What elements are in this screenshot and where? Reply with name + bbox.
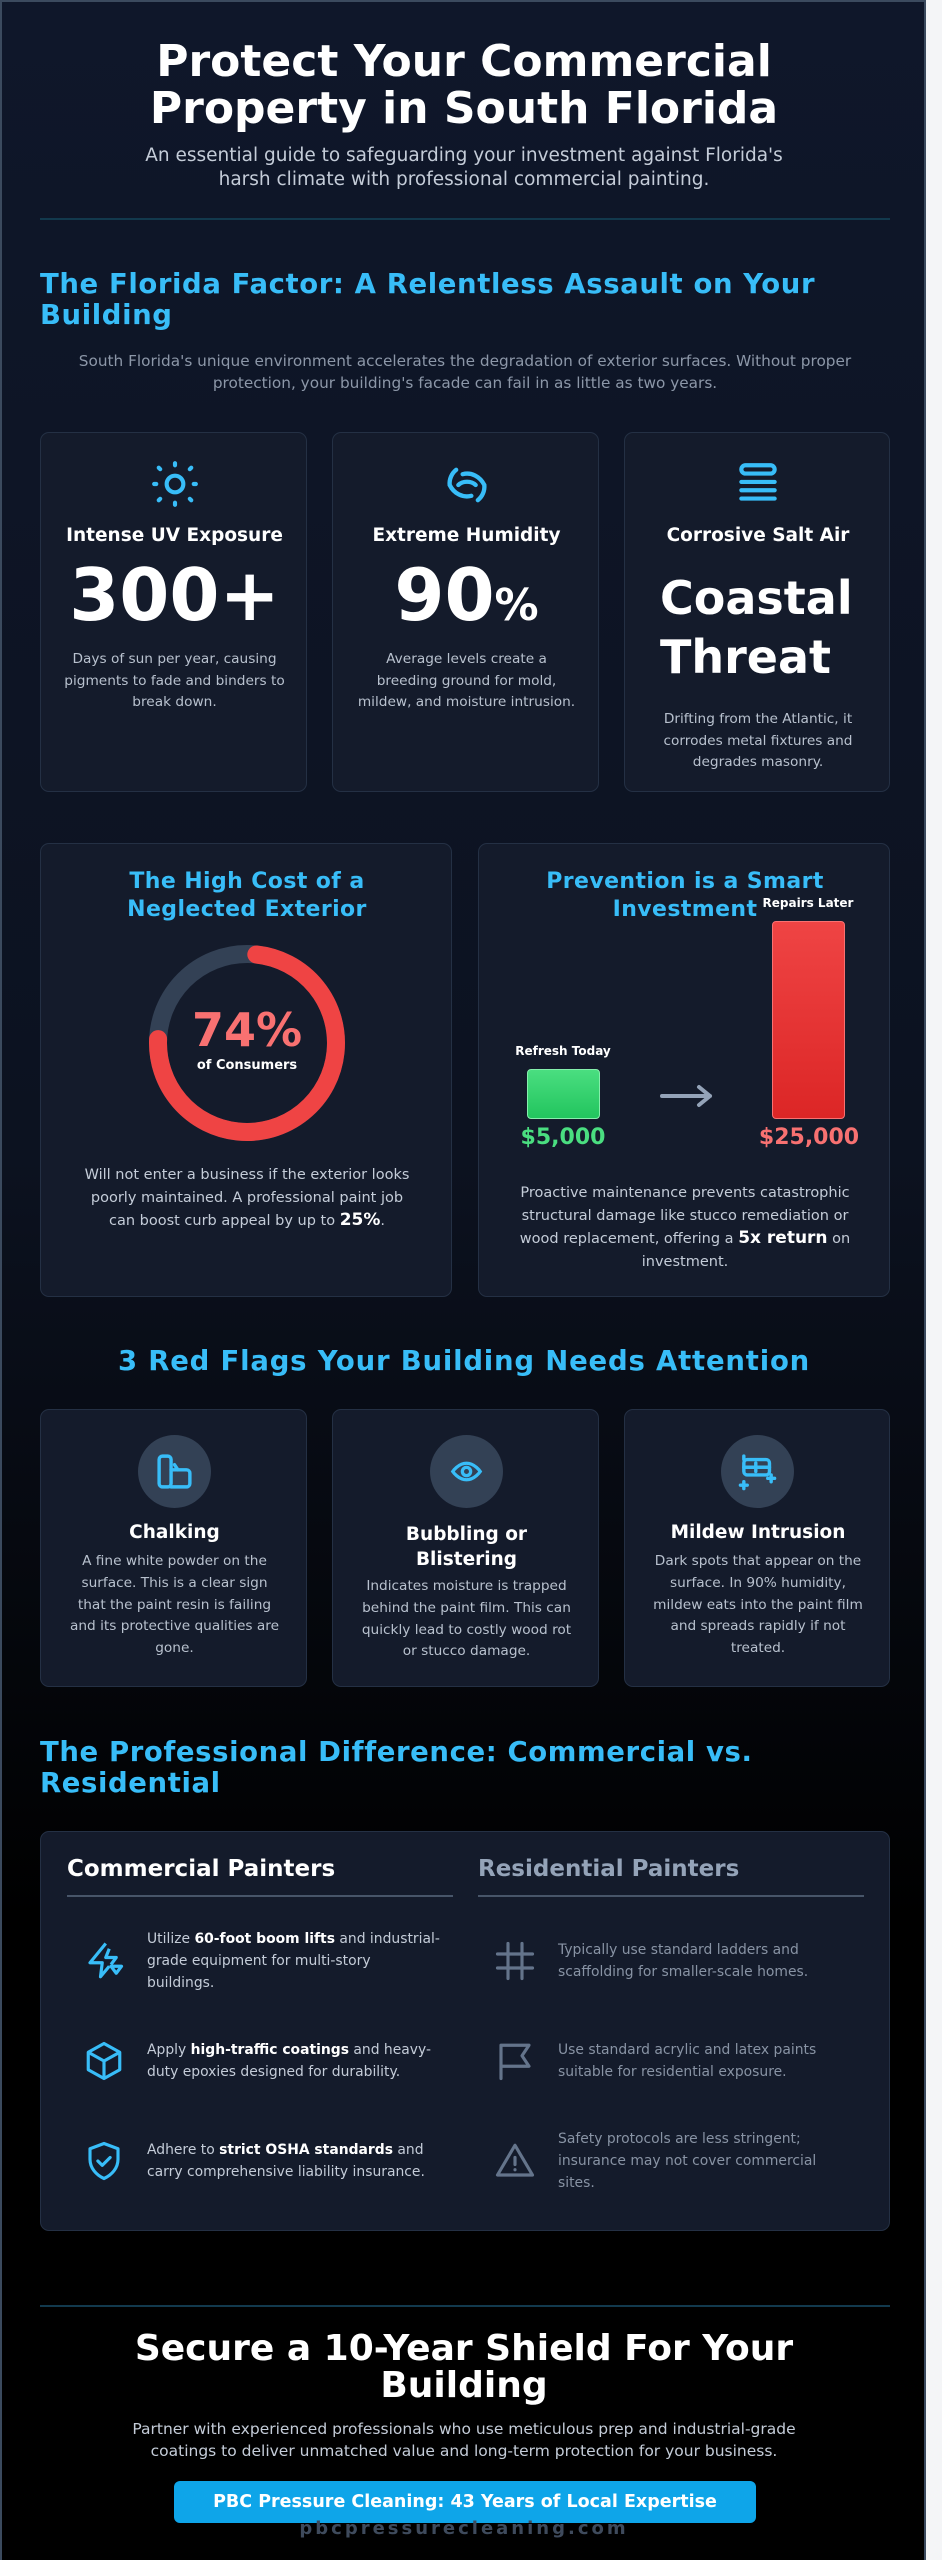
CTA button: PBC Pressure Cleaning: 43 Years of Local Expertise [213, 2492, 717, 2512]
panel: humidity [332, 432, 599, 792]
description: surface. This is a clear sign [81, 1575, 268, 1591]
card title: Intense UV Exposure [66, 525, 283, 546]
description [358, 651, 575, 710]
icon: shield [88, 2142, 120, 2180]
description: that the paint resin is failing [78, 1597, 271, 1613]
description: Will not enter a business if the exterior looks [85, 1167, 409, 1183]
icon: humidity [447, 468, 487, 502]
text: OSHA: Adhere to strict OSHA standards and carry comprehensive liability insurance. [147, 2142, 425, 2180]
icon: mildew [721, 1435, 794, 1508]
title [150, 36, 778, 134]
footer heading [135, 2328, 794, 2406]
column heading: commercial: Commercial Painters [67, 1856, 335, 1882]
column heading: commercial [67, 1856, 453, 1897]
panel: high cost [40, 843, 452, 1297]
description: and its protective qualities are [70, 1618, 279, 1634]
icon: layers [739, 463, 777, 501]
panel title [546, 869, 824, 922]
text: safety: Safety protocols are less stringent; [558, 2131, 801, 2147]
card title: Mildew Intrusion [671, 1522, 845, 1543]
text: boom lifts: buildings. [147, 1975, 214, 1991]
icon: chalking [138, 1435, 211, 1508]
panel title: Neglected Exterior [127, 897, 367, 922]
footer paragraph [132, 2420, 796, 2460]
card title [406, 1524, 527, 1570]
text: safety [558, 2131, 816, 2191]
description [70, 1553, 279, 1656]
icon: warning [496, 2144, 534, 2177]
bar chart: $5,000 [521, 1125, 605, 1150]
footer paragraph: Partner with experienced professionals who use meticulous prep and industrial-grade [132, 2420, 796, 2438]
text: boom lifts: Utilize 60-foot boom lifts and industrial- [147, 1931, 440, 1947]
card title: Bubbling or [406, 1524, 527, 1545]
panel: comparison [40, 1831, 890, 2231]
text: safety: insurance may not cover commercial [558, 2153, 816, 2169]
icon: cube [86, 2042, 122, 2080]
bar chart: Refresh Today [515, 1044, 611, 1058]
text: boom lifts: grade equipment for multi-story [147, 1953, 371, 1969]
donut chart [149, 945, 345, 1141]
description: A fine white powder on the [82, 1553, 267, 1569]
description: Drifting from the Atlantic, it corrodes metal fixtures and degrades masonry. [664, 711, 852, 770]
description [85, 1167, 409, 1230]
icon: flag [499, 2044, 531, 2080]
donut chart: of Consumers [197, 1058, 297, 1073]
description: Indicates moisture is trapped behind the paint film. This can quickly lead to costly wood rot or stucco damage. [362, 1578, 571, 1659]
icon: eye [430, 1435, 503, 1508]
text: ladders: Typically use standard ladders and scaffolding for smaller-scale homes. [558, 1942, 808, 1980]
intro paragraph: protection, your building's facade can fail in as little as two years. [213, 374, 717, 392]
panel: mildew [624, 1409, 890, 1687]
panel title [127, 869, 367, 922]
description: poorly maintained. A professional paint job [91, 1190, 403, 1206]
stat: 300+ [69, 553, 280, 637]
heading: professional difference: The Professional Difference: Commercial vs. Residential [40, 1736, 753, 1799]
intro paragraph [79, 352, 852, 392]
footer heading: Secure a 10-Year Shield For Your [135, 2328, 793, 2369]
panel title: Investment [613, 897, 757, 922]
column heading: residential: Residential Painters [478, 1856, 739, 1882]
icon: boom lift [88, 1942, 124, 1978]
card title: Corrosive Salt Air [667, 525, 849, 546]
stat: 90% [394, 553, 539, 637]
intro paragraph: South Florida's unique environment accelerates the degradation of exterior surfaces. Without proper [79, 352, 851, 370]
description: mildew eats into the paint film [653, 1597, 863, 1613]
text: paints: Use standard acrylic and latex paints suitable for residential exposure. [558, 2042, 816, 2080]
panel: prevention [478, 843, 890, 1297]
icon: grid [496, 1942, 534, 1980]
stat: Threat [660, 630, 831, 684]
description: treated. [731, 1640, 785, 1656]
description: can boost curb appeal by up to 25%. [109, 1210, 385, 1230]
donut chart: 74% [192, 1003, 302, 1057]
subtitle [145, 145, 783, 190]
panel title: Prevention is a Smart [546, 869, 824, 894]
panel: salt air [624, 432, 890, 792]
stat [660, 571, 853, 684]
description: gone. [155, 1640, 194, 1656]
panel: UV [40, 432, 307, 792]
website url: pbcpressurecleaning.com [299, 2518, 629, 2539]
heading: Florida factor: The Florida Factor: A Relentless Assault on Your Building [40, 268, 815, 331]
subtitle: harsh climate with professional commercial painting. [219, 169, 709, 190]
panel: bubbling [332, 1409, 599, 1687]
card title: Blistering [416, 1549, 517, 1570]
icon: sun [152, 461, 198, 507]
subtitle: An essential guide to safeguarding your investment against Florida's [145, 145, 783, 166]
description: Average levels create a [386, 651, 547, 667]
description [653, 1553, 863, 1656]
description: Dark spots that appear on the [655, 1553, 861, 1569]
CTA button [174, 2481, 756, 2523]
card title: Extreme Humidity [372, 525, 561, 546]
card title: Chalking [129, 1522, 220, 1543]
text: safety: sites. [558, 2175, 595, 2191]
title: Protect Your Commercial [156, 36, 772, 87]
panel title: The High Cost of a [129, 869, 365, 894]
description: Proactive maintenance prevents catastrophic structural damage like stucco remediation or wood replacement, offering a 5x return on investment. [520, 1185, 850, 1270]
heading: red flags: 3 Red Flags Your Building Needs Attention [118, 1345, 810, 1377]
description: and spreads rapidly if not [670, 1618, 846, 1634]
title: Property in South Florida [150, 83, 778, 134]
description: breeding ground for mold, mildew, and moisture intrusion. [358, 672, 575, 710]
column heading: residential [478, 1856, 864, 1897]
description: surface. In 90% humidity, [670, 1575, 846, 1591]
text: boom lifts [147, 1931, 440, 1991]
panel: chalking [40, 1409, 307, 1687]
stat: Coastal [660, 571, 853, 625]
footer heading: Building [380, 2365, 548, 2406]
bar chart [515, 896, 859, 1150]
bar chart: Repairs Later [763, 896, 853, 910]
text: coatings: Apply high-traffic coatings and heavy-duty epoxies designed for durability. [147, 2042, 431, 2080]
description: Days of sun per year, causing pigments to fade and binders to break down. [64, 651, 285, 710]
footer paragraph: coatings to deliver unmatched value and long-term protection for your business. [151, 2442, 777, 2460]
bar chart: $25,000 [759, 1125, 859, 1150]
